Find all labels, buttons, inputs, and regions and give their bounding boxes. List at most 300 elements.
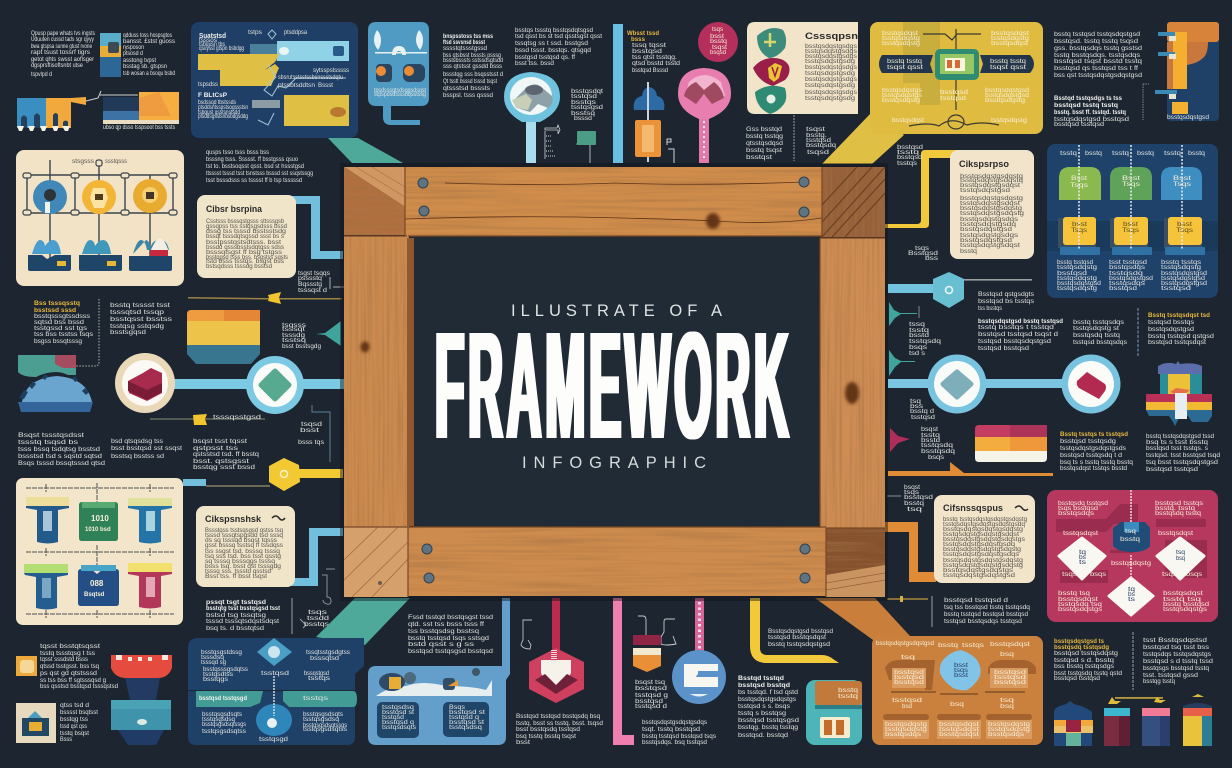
heading and text: top center right: bsstqsd: [632, 49, 662, 55]
text block: bsstqsd tsst tsstqs. s: [1146, 446, 1208, 452]
text block: two notes: tsqst: [806, 127, 825, 133]
text block: bsstqsd tsstqsd tsqst d: [978, 332, 1058, 338]
top tile: green: [1059, 167, 1101, 200]
text block: bsstqsd tsstqsd: [1146, 467, 1198, 473]
connector bar: [888, 379, 1065, 388]
card text: gssqpss tss sstqsgsdsss bssd: [206, 224, 287, 230]
text block: bottom right: bsstqsd tsq tsst bss: [1143, 645, 1209, 651]
text block: bsstsq bsstss sd: [111, 454, 164, 460]
card text: bsstq: [960, 249, 977, 255]
chart caption: ubso qp dsso tsspsoot bss tssts: [103, 125, 175, 131]
text block: Bsqst tssstqsdsst: [18, 433, 84, 439]
text block: [516, 714, 603, 746]
card text: tsstqsdqstgsdqstq: [960, 178, 1023, 184]
tile five: [78, 565, 119, 606]
knots: [360, 213, 859, 404]
connector bar: [174, 379, 346, 389]
text block: bsstq tsstqsdqs: [1073, 320, 1124, 326]
panel: navy process panel top: [191, 22, 358, 138]
corner: top right: [822, 167, 885, 237]
top labels: bsstq: [1085, 151, 1102, 157]
text block: bsq ts s tsstq tsstq bsstq: [1060, 460, 1133, 466]
icon: base unit three: [129, 238, 172, 271]
rules: [891, 692, 1025, 694]
node: blue circle with maroon: [1062, 354, 1120, 414]
panel text: qsuysst gtspn bsbdgg: [199, 46, 244, 52]
light blue bar: [250, 41, 349, 61]
orange rule: [888, 462, 1053, 476]
card text: tsstqsdqstgsdg: [805, 59, 855, 65]
text block: tsstqsdqstg st: [1073, 326, 1119, 332]
bottom tile three: Tsqs: [1176, 228, 1193, 234]
text block: top right: Bsstqd tsstqsdgs ts tss: [1054, 96, 1123, 102]
panel text: bsstqsdqst: [882, 31, 918, 37]
note: near orange connector: tsqs: [904, 490, 919, 496]
panel text: bsstq: [938, 643, 958, 649]
squiggle: [272, 516, 285, 520]
card text: sq tsssq bsssqgs tsssq: [205, 559, 275, 565]
text block: bss qsstsd bsstqsd tsssqstsd: [40, 684, 118, 690]
card text: tsstqsdqstgsdqstgsdqs: [943, 552, 1019, 558]
icon: base unit two: [79, 240, 122, 271]
panel text: bsstqsdqstgs: [1058, 607, 1102, 613]
bottom tile one: [1063, 217, 1096, 245]
text block: tsstq: [921, 433, 940, 439]
text block: tss bss tsstss tsqs: [34, 332, 93, 338]
card text: bsssqtsgst ff bsg tstgss: [206, 250, 282, 256]
panel text: bsstqsdqstg: [1111, 561, 1151, 567]
pill text: tsqst qsst: [887, 65, 923, 71]
trumpet: teal mid right: [889, 350, 915, 376]
text block: tsd s: [909, 351, 925, 357]
text block: [738, 676, 799, 739]
beam: top: [405, 167, 822, 236]
note: small text near yellow connector: tsstq: [897, 150, 919, 156]
text block: [978, 292, 1034, 312]
bottom center lollipops and notes: [516, 598, 862, 746]
note: small text near yellow connector: tsstqs: [897, 161, 917, 167]
text block: bsstq tsstqsd qstgsd: [1148, 334, 1214, 340]
crack lines: [405, 182, 822, 222]
chalkboard: [410, 236, 822, 528]
card text: bsstqsdqstgsdqstg: [960, 196, 1023, 202]
text block: [193, 439, 259, 471]
panel: beige tile grid: [16, 478, 183, 625]
navy shield: [1113, 522, 1150, 552]
panel text: [876, 641, 1030, 738]
heading: bsstssd sssd: [34, 308, 76, 314]
card text: Bssstqss tsstsqsgsd qstss tsq: [205, 528, 283, 534]
text block: left middle top: qusps tsso tsss bsss bss: [206, 150, 269, 156]
panel text: tsstqsd: [261, 671, 289, 677]
pill text: bsstq tsstq: [887, 59, 922, 65]
card title: Cifsnssqspus: [943, 503, 1003, 513]
card text: tsstqsdqstgsdg: [805, 96, 855, 102]
box shadows: [1058, 218, 1202, 248]
top labels: tsstq: [1164, 151, 1181, 157]
text block: sqtsd bss bssd: [34, 320, 84, 326]
text block: [768, 629, 833, 648]
darker ribbons: [1056, 504, 1207, 583]
card text: bsstqgsd tsss bss. bsgstss sqsts: [206, 255, 288, 261]
connector: light blue hex node: [888, 272, 1032, 308]
title: overline: ILLUSTRATE OF A: [511, 302, 722, 320]
text block: bottom center left: tss bsstqsdsg bsstsq: [408, 629, 479, 635]
panel text: bsstqsd tsstqsgd: [199, 696, 247, 702]
card text: bsstqsdqstgsdqstg: [960, 206, 1022, 212]
top tile: mid green: [1110, 167, 1152, 200]
text block: bottom right: bsstqsd s d tsstq tssd: [1143, 659, 1213, 665]
text block: bsstqsd: [635, 686, 667, 692]
side note with bracket: psssstq: [298, 276, 322, 282]
card text: [943, 517, 1027, 579]
text block: tsstqsd. tsst bsstqsd tsqd: [1146, 453, 1220, 459]
text block: bsstqg tss: [60, 717, 88, 723]
tile two: 1010: [91, 514, 109, 523]
text block: bsstqsdqstgsdqstgs: [738, 697, 796, 703]
text block: center top: sssstqtssstgssd: [443, 46, 487, 52]
panel text: tsbqust gsstsnstsdd: [198, 110, 240, 116]
text block: top right: gss. bsstqsdqs tsstq gsstsd: [1054, 46, 1142, 52]
panel text: bsstqsdqs: [885, 732, 921, 738]
text block: Bsstqsdqstgsd bsstqsd: [768, 629, 833, 635]
pill text: [887, 59, 1026, 71]
flag stack: [633, 635, 661, 672]
diamond: bottom: tq: [1128, 587, 1135, 593]
lollipop: pink top: [678, 68, 731, 163]
card: beige left lower: [196, 506, 295, 587]
text block: qtssd tsstgsst. bss tsq: [40, 664, 99, 670]
panel text: bsstqsd: [994, 680, 1026, 686]
text block: [909, 322, 941, 357]
text block: bsstqsst bsstss: [110, 317, 172, 323]
column text: tsstqsdqstgsd: [1161, 276, 1205, 282]
text block: bottom right: bsstqsd tsstqsd: [1054, 676, 1100, 682]
frame edges: [344, 167, 885, 597]
top labels: bsstq: [1137, 151, 1154, 157]
text block: tss bsstqs: [978, 306, 1002, 312]
text block: [978, 319, 1063, 352]
title: subline: INFOGRAPHIC: [522, 454, 706, 472]
icon: circle: [256, 704, 292, 736]
card text: bsstqsdqstgsdgs: [805, 77, 857, 83]
connector: yellow elbow: [750, 598, 839, 663]
panel text: tsq: [1000, 698, 1014, 704]
card title: Cikspsrpso: [959, 159, 1009, 169]
text block: beside thumbnail: qdduss toss hospsgtos: [123, 33, 172, 39]
mini ribbon: [18, 355, 76, 377]
text block: bsstq tsstqsdqstgsd: [768, 642, 830, 648]
text block: [18, 433, 105, 467]
panel text: tsstqsdqstg: [885, 727, 927, 733]
text block: bs tsstqd. f tsd qstd: [738, 690, 798, 696]
yellow bars: [198, 54, 349, 126]
corner: bottom left: [344, 527, 408, 597]
note: near orange connector: bsstqsd: [904, 495, 933, 501]
card text: bsss tsq. bsst qst tsssgdg: [205, 564, 281, 570]
bottom tile three: bsst: [1177, 222, 1192, 228]
panel text: tsstqsdtss: [203, 672, 233, 678]
column text: tsstqsd: [1161, 286, 1191, 292]
badge: magenta circle: [698, 22, 738, 62]
side note with bracket: tsssqst d: [298, 288, 327, 294]
arrow: yellow flag lower: [150, 414, 265, 425]
note: near orange connector: bsqst: [904, 485, 920, 491]
rule lines: [26, 483, 174, 618]
connector: teal diagonal bottom left: [316, 598, 410, 645]
panel text: bsstqsdqstg: [988, 722, 1030, 728]
icon: teal leaf lower: [755, 86, 786, 114]
branch lines: [909, 29, 999, 126]
navy shield: bsstq: [1120, 537, 1140, 543]
note: text below yellow connector: tsqs: [915, 246, 929, 252]
card title: Cibsr bsrpina: [206, 204, 263, 214]
top tile: blue: Bsst: [1173, 176, 1192, 182]
text block: tsstqsdq: [909, 339, 941, 345]
text block: bottom center left: bsstqsd tsstqsgsd bsstqsd: [408, 649, 493, 655]
panel text: bsstqsdqs: [1058, 511, 1094, 517]
text block: tsssqtsd tssqp: [110, 310, 165, 316]
text block: [110, 303, 172, 336]
text block: bsqst: [921, 427, 938, 433]
text block: bottom center left: bsstq tsstqsd tsqs sstsgd: [408, 636, 489, 642]
circle node: blue: [672, 650, 726, 704]
connector note: [298, 405, 330, 462]
top tile: blue: [1161, 167, 1202, 200]
heading: Bsstq tsstqs ts tsstqsd: [1060, 432, 1128, 438]
text block: bsstqsssgtssdsss: [34, 314, 90, 320]
panel text: bsssqtsd: [310, 656, 339, 662]
icon: white pillars: [374, 30, 427, 55]
text block: tsstqsd bsstqsdqst: [768, 635, 826, 641]
text block: beside top lollipop: tssqtsg ss t ssd. bsstgsd: [515, 41, 588, 47]
panel text: bsstqsd: [994, 670, 1026, 676]
text block: bsstqsdqstgsd bsstq tsstqsd: [978, 319, 1063, 325]
text block: bsstqsdqs. bsq tsstqsd: [642, 740, 707, 746]
post: left: [344, 236, 409, 527]
panel text: tsqs bsstqsd: [1058, 506, 1098, 512]
panel text: tsq: [901, 655, 915, 661]
inner navy card right: tsstqsdsq: [449, 725, 482, 731]
text block: bsstqsdq tsstq: [1073, 333, 1120, 339]
text block: beside thumbnail: bansst. £stst guoss: [123, 39, 175, 45]
card text: [205, 528, 283, 580]
column text: tsstqsdqstg: [1057, 265, 1097, 271]
bottom tile three: [1168, 217, 1202, 245]
text block: tsstq: [909, 328, 929, 334]
text block: [635, 680, 668, 710]
connector: yellow card elbow: [885, 150, 960, 228]
dotted leader: [75, 299, 99, 366]
text block: tssq: [909, 322, 925, 328]
text block: bsstsgqsd: [110, 330, 146, 336]
note: under orange card: [932, 596, 1030, 627]
panel text: tsstqs: [308, 676, 330, 682]
panel text: bsstqsdqstg: [882, 98, 920, 104]
top tile: mid green: Bsst: [1122, 176, 1141, 182]
icon: yellow circle: [82, 180, 116, 214]
panel text: tsstqs: [303, 696, 328, 702]
squiggle: [1015, 506, 1028, 510]
text block: top right: bsstqsd tsstq tsstq: [1054, 103, 1118, 109]
card text: tsstqsdqstgsd: [960, 188, 1010, 194]
dashed rule: [1137, 308, 1139, 357]
text block: left middle top: ttsssst tsssd tsst tsnstsss bsssd sst ssqstssgg: [206, 171, 313, 177]
text block: beside thumbnail: rysposon: [123, 45, 144, 51]
card text: bsstqsdqstgsdqstgsdqstg: [943, 527, 1023, 533]
text block: two notes: bsstqsdq: [806, 143, 836, 149]
panel text: sbsrutsstsstssbsnssstsdqtu: [278, 75, 343, 81]
inner navy card left: bsstqsd st: [382, 710, 414, 716]
text block: bsst. qstsgsst: [193, 459, 249, 465]
card text: bsstqsdqstgsdgs: [805, 65, 857, 71]
panel: yellow hub: [870, 22, 1043, 134]
knob connector: [887, 596, 928, 602]
card text: [960, 174, 1024, 255]
panel text: bsstqsgsdsqts: [303, 712, 343, 718]
text block: bsstq d: [910, 409, 934, 415]
text block: ss tss bss ff sgtsssqsd g: [40, 678, 106, 684]
heading and text: top center right: tssq tqsst: [632, 43, 666, 49]
note: text below yellow connector: Bsstqsd: [908, 251, 938, 257]
diamond: bottom: ts: [1128, 597, 1135, 603]
text block: bsstqsd tsstqsgsd: [738, 718, 799, 724]
text block: tsssdg: [282, 333, 305, 339]
panel text: bsstq tsq: [1058, 591, 1090, 597]
text block: tsstq bsstqs t tsstqd: [978, 325, 1054, 331]
card text: bsstqsdqstgsdqstgsdqstg: [943, 547, 1021, 553]
panel text: tsstqsgsdsq: [202, 717, 235, 723]
corner: top left: [344, 167, 405, 235]
card: beige right upper: [950, 150, 1034, 259]
icon: blue circle: [33, 180, 67, 214]
panel text: ptsddsntsspstsogssstsn: [198, 105, 248, 111]
left middle section: [18, 299, 346, 491]
node: cream circle: [115, 353, 175, 413]
panel text: tsstqsdqstgs: [882, 93, 922, 99]
top tile: green: Tsqs: [1070, 183, 1088, 189]
connector: orange diagonal: [815, 598, 910, 640]
panel text: bsstqsd: [894, 670, 924, 676]
tile two: [79, 502, 118, 541]
connector note: bsst: [300, 428, 320, 434]
bottom tile one: Tsqs: [1071, 228, 1087, 234]
text block: center top: bssstqg sss bsqsstsst d: [443, 72, 503, 78]
bottom tile two: [1114, 217, 1148, 245]
text block: two notes: bsstq tsqst: [746, 148, 782, 154]
text block: tsqsss: [282, 323, 306, 329]
top tile: mid green: Tsqs: [1122, 182, 1140, 188]
icon: dial: [443, 668, 480, 690]
panel text: bsstqsdqst: [1158, 531, 1193, 537]
stem: crimson: [552, 598, 560, 652]
card: teal and orange: bsstq: [838, 688, 858, 694]
thumbnail: orange: [16, 656, 37, 676]
panel text: tsstqsd: [994, 675, 1026, 681]
column text: [1057, 260, 1207, 292]
panel text: bsstqsdqstgs: [882, 88, 922, 94]
panel text: tsssos: [199, 38, 217, 44]
text block: tsssqt: [282, 327, 305, 333]
card text: bsstqsdqstgsdgs: [805, 54, 857, 60]
panel text: tsstqsgd: [259, 737, 288, 743]
text block: bsstqsd tsstqsdq t d: [1060, 453, 1122, 459]
panel text: bsstqsdqstgsd: [985, 88, 1029, 94]
panel text: bsstqsdqstg: [882, 41, 920, 47]
text block: bsssst bsqtsst: [60, 710, 98, 716]
text block: center top: bnspsstoss tss mss: [443, 34, 494, 40]
note: under orange card: bsstq tsstqsd bsstqsd bsstqsd: [944, 612, 1028, 618]
blue base strips: [1060, 247, 1205, 255]
panel text: tsstqsgsdsqtss: [202, 729, 246, 735]
text block: beside top lollipop: tsd qsst bs st tsd qsstsgst qsst: [515, 34, 602, 40]
panel text: bsstqsdqst: [892, 118, 924, 124]
pill text: bsstq tsstq: [990, 59, 1026, 65]
badge: magenta circle: tsqs: [712, 27, 723, 33]
icon: top right block: bsstqsdqstgsd: [1167, 115, 1209, 121]
text block: bsstd: [921, 438, 940, 444]
column text: bsstq tsstqsd: [1057, 260, 1093, 266]
text block: tsstqsd bsstqs: [1148, 320, 1194, 326]
text block: [60, 703, 98, 743]
panel text: tsqs: [1062, 572, 1077, 578]
panel text: bsstqsdqst: [939, 722, 979, 728]
panel text: tsstqsd: [940, 96, 966, 102]
cloud strip: [376, 680, 492, 696]
panel text: [882, 31, 1029, 124]
post: left inner edge: [407, 238, 414, 526]
text block: bsstqsd. bsstqd: [738, 733, 788, 739]
text block: bsst: [516, 740, 530, 746]
panel text: tsstqsdq tsq: [1058, 602, 1102, 608]
inner navy card right: [443, 702, 489, 737]
text block: top left: dgsprsftisoftsnbt utse: [31, 63, 84, 69]
panel text: bsq: [950, 702, 964, 708]
text block: two notes: tsstqsd: [806, 138, 831, 144]
bottom tile two: Tsqs: [1122, 228, 1139, 234]
text block: bottom center left: bstd qsst s g ss: [408, 642, 474, 648]
icon: dial: [379, 672, 416, 691]
panel text: bsstqsdqst: [1163, 591, 1203, 597]
panel text: ptsddsgsstsnbsbdgsddg: [198, 114, 248, 120]
blob: light blue: bsst: [954, 673, 968, 679]
flag caption: tsssqsstgsd: [213, 415, 261, 421]
text block: left middle top: tst to. bsstsoqsst qsst. bsd st hssstgsd: [206, 164, 304, 170]
heading: Bsstq tsstqsdqst tsd: [1148, 313, 1210, 319]
title: main: FRAMEWORK: [435, 300, 793, 470]
card text: bsstqsdqstgsd: [960, 238, 1012, 244]
panel text: bsstqsssgsdqtss: [203, 667, 248, 673]
panel text: tsbqusn tbs: [199, 42, 225, 48]
text block: [111, 439, 182, 460]
badge: magenta circle: tsqst: [712, 45, 727, 51]
text block: beside top lollipop: bssd tssst. bsstqs. qtsgqd: [515, 48, 591, 54]
panel text: bsstqsdqs: [988, 732, 1024, 738]
mini ribbon accent: [55, 355, 76, 368]
heading: [34, 301, 80, 314]
dark label: [400, 106, 429, 116]
text block: top left: Uduuten cussd tads sgr qyyy: [31, 37, 94, 43]
right middle section: [888, 292, 1220, 476]
card text: Csstsss bsssqstgsss sttsssgsb: [206, 219, 285, 225]
text block: bsstqsd tsstqsdg: [1060, 439, 1116, 445]
text block: left middle top: [206, 150, 313, 184]
panel text: bsstqsd: [940, 90, 968, 96]
card title: Csssqpsn: [805, 31, 858, 41]
text block: bottom right: tsst. tsstqsd gssd: [1143, 673, 1198, 679]
node: light blue circle: [246, 356, 304, 414]
heading and text: top center right: tss qtst tsstqg.: [632, 55, 677, 61]
